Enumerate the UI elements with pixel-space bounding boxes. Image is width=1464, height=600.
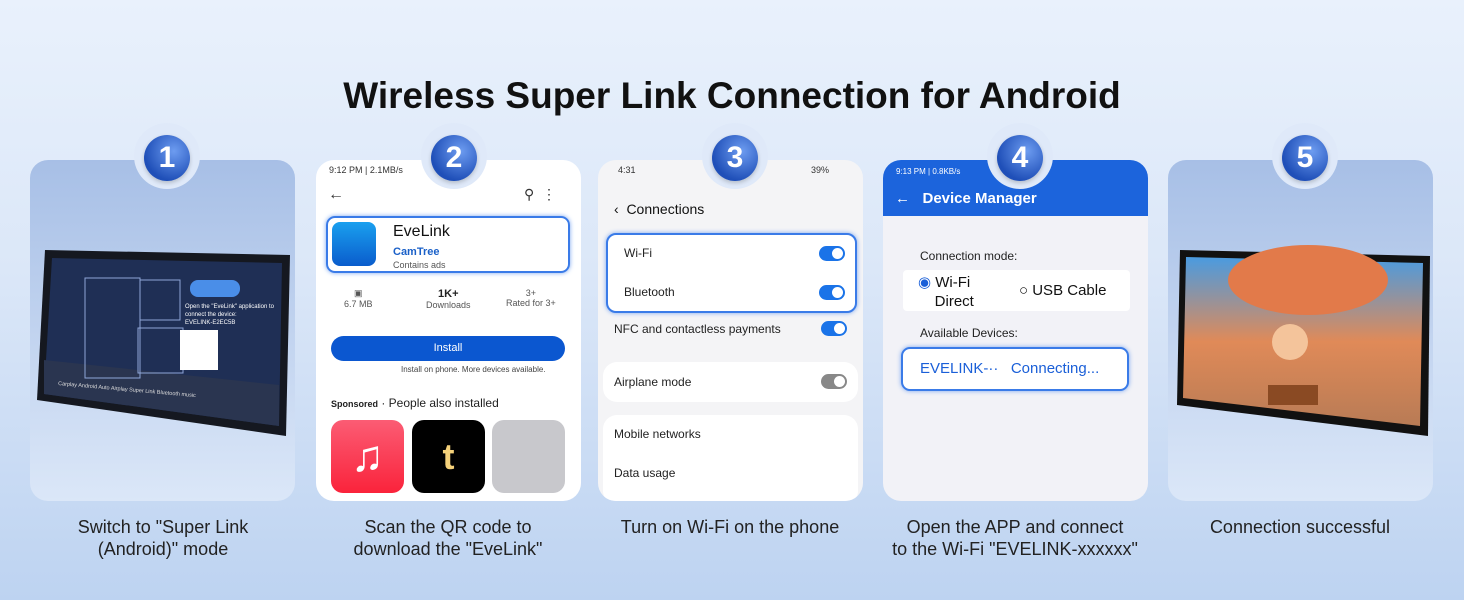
title: Wireless Super Link Connection for Android <box>343 75 1121 116</box>
caption 1: (Android)" mode <box>98 539 228 559</box>
panel 2: play store: 3+ <box>526 288 536 298</box>
panel 2: play store: ⚲ ⋮ <box>524 186 556 202</box>
panel 4: device manager <box>883 160 1148 501</box>
caption 5: Connection successful <box>1210 517 1390 537</box>
caption 2: download the "EveLink" <box>354 539 542 559</box>
panel 2: play store: ← <box>328 186 344 203</box>
panel 3: connections: ‹ Connections <box>614 201 704 217</box>
panel 3: connections: Mobile networks <box>614 427 701 441</box>
panel 2: play store: 6.7 MB <box>344 299 373 309</box>
badge 2 <box>431 135 477 181</box>
panel 2: play store: 1K+ <box>438 288 459 300</box>
caption 1 <box>78 517 248 559</box>
badge 1: 1 <box>159 141 175 174</box>
caption 4: to the Wi-Fi "EVELINK-xxxxxx" <box>892 539 1138 559</box>
install button: Install <box>434 342 462 354</box>
panel 3: connections: Data usage <box>614 466 675 480</box>
app card: Contains ads <box>393 260 446 270</box>
app card: CamTree <box>393 246 439 258</box>
wifi bt box: Bluetooth <box>624 285 675 299</box>
caption 3: Turn on Wi-Fi on the phone <box>621 517 839 537</box>
panel 4: device manager: Direct <box>935 293 974 310</box>
panel 2: play store: Downloads <box>426 300 471 310</box>
panel 2: play store: Sponsored · People also installed <box>331 396 499 410</box>
panel 3: connections: Airplane mode <box>614 375 691 389</box>
caption 1: Switch to "Super Link <box>78 517 248 537</box>
panel 2: play store: ▣ <box>354 288 363 298</box>
wifi bt box <box>606 233 857 313</box>
panel 2: play store <box>316 160 581 501</box>
panel 1: tablet super link <box>30 160 295 501</box>
panel 4: device manager: Available Devices: <box>920 326 1018 340</box>
connecting box: EVELINK-·· Connecting... <box>920 360 1099 377</box>
connecting box <box>901 347 1129 391</box>
panel 3: connections: 39% <box>811 165 829 175</box>
tablet 1: EVELINK-E2EC5B <box>185 320 235 326</box>
panel 2: play store: t <box>442 436 454 477</box>
panel 4: device manager: ○ USB Cable <box>1019 282 1106 299</box>
caption 2 <box>354 517 542 559</box>
badge 5: 5 <box>1297 141 1313 174</box>
badge 4: 4 <box>1012 141 1028 174</box>
tablet 1: Open the "EveLink" application to <box>185 304 275 310</box>
caption 4 <box>892 517 1138 559</box>
panel 4: device manager: 9:13 PM | 0.8KB/s <box>896 167 960 176</box>
panel 3: connections: 4:31 <box>618 165 636 175</box>
panel 5: tablet success <box>1168 160 1433 501</box>
badge 3 <box>712 135 758 181</box>
panel 4: device manager: ← Device Manager <box>895 190 1037 207</box>
badge 1 <box>144 135 190 181</box>
panel 2: play store: ♫ <box>351 432 384 481</box>
badge 3: 3 <box>727 141 743 174</box>
panel 2: play store: 9:12 PM | 2.1MB/s <box>329 165 403 175</box>
badge 2: 2 <box>446 141 462 174</box>
panel 4: device manager: Connection mode: <box>920 249 1017 263</box>
install button <box>331 336 565 361</box>
panel 3: connections: NFC and contactless payments <box>614 322 781 336</box>
panel 3: connections <box>598 160 863 501</box>
tablet 1: connect the device: <box>185 312 237 318</box>
tablet 1: Carplay Android Auto Airplay Super Link Bluetooth music <box>58 381 196 399</box>
app card: EveLink <box>393 223 450 240</box>
tablet 5 <box>1177 245 1430 436</box>
caption 4: Open the APP and connect <box>907 517 1123 537</box>
panel 4: device manager: ◉ Wi-Fi <box>918 274 970 291</box>
caption 2: Scan the QR code to <box>364 517 532 537</box>
badge 5 <box>1282 135 1328 181</box>
wifi bt box: Wi-Fi <box>624 246 652 260</box>
tablet 1 <box>37 250 290 436</box>
app card <box>326 216 570 273</box>
panel 2: play store: Rated for 3+ <box>506 298 556 308</box>
panel 2: play store: Install on phone. More devices available. <box>401 365 546 374</box>
badge 4 <box>997 135 1043 181</box>
